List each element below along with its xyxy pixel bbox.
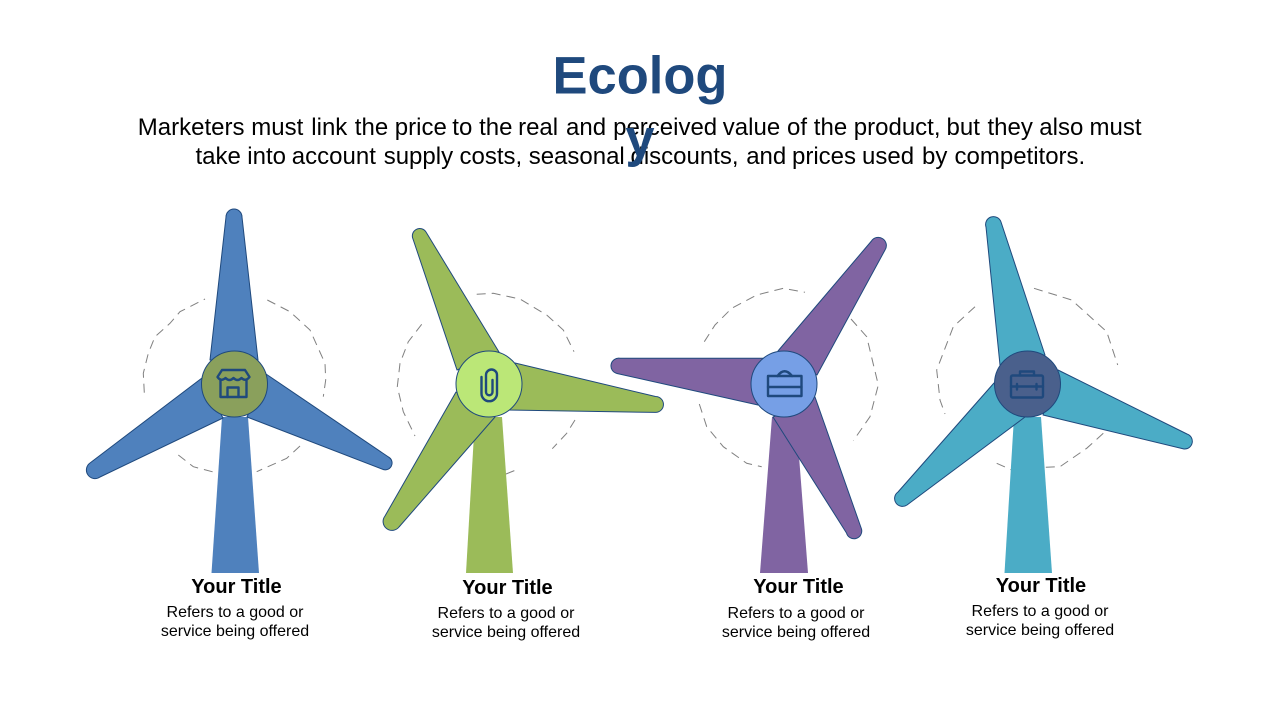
subtitle text block: discounts, [630, 143, 739, 170]
subtitle text block: into [247, 143, 286, 170]
subtitle text block: they [988, 114, 1033, 141]
caption: blue turbine [161, 576, 309, 640]
subtitle text block: to [452, 114, 472, 141]
caption: purple turbine: service being offered [722, 624, 870, 641]
caption: green turbine [432, 577, 580, 641]
caption: teal turbine [966, 575, 1114, 639]
caption: blue turbine: service being offered [161, 623, 309, 640]
caption: teal turbine: Refers to a good or [972, 603, 1109, 620]
subtitle text block: seasonal [529, 143, 625, 170]
subtitle text block: must [251, 114, 304, 141]
subtitle text block: by [922, 143, 947, 170]
icon: paperclip [482, 370, 497, 401]
subtitle text block: product, [854, 114, 941, 141]
subtitle text block: supply [384, 143, 453, 170]
caption: green turbine: Your Title [462, 577, 553, 599]
subtitle text block: the [479, 114, 512, 141]
subtitle text block: prices [792, 143, 856, 170]
icon: storefront [218, 370, 250, 397]
subtitle text block: the [355, 114, 388, 141]
subtitle text block: take [196, 143, 241, 170]
subtitle text block [138, 114, 1142, 170]
caption: teal turbine: Your Title [996, 575, 1086, 597]
panel: green wind turbine [383, 229, 663, 573]
icon: briefcase with clasps [1011, 372, 1043, 398]
subtitle text block: costs, [460, 143, 522, 170]
caption: green turbine: service being offered [432, 624, 580, 641]
subtitle text block: of [787, 114, 807, 141]
panel: blue wind turbine [86, 209, 392, 573]
caption: blue turbine: Your Title [191, 576, 282, 598]
subtitle text block: the [814, 114, 847, 141]
subtitle text block: perceived [613, 114, 717, 141]
subtitle text block: and [566, 114, 606, 141]
subtitle text block: also [1039, 114, 1083, 141]
subtitle text block: competitors. [954, 143, 1085, 170]
caption: purple turbine [722, 576, 870, 641]
panel: teal wind turbine [895, 217, 1192, 573]
subtitle text block: and [746, 143, 786, 170]
subtitle text block: must [1090, 114, 1142, 141]
subtitle text block: value [723, 114, 780, 141]
icon: briefcase [768, 371, 802, 396]
subtitle text block: but [946, 114, 980, 141]
caption: purple turbine: Refers to a good or [728, 605, 865, 622]
subtitle text block: real [518, 114, 558, 141]
subtitle text block: link [311, 114, 348, 141]
subtitle text block: account [292, 143, 376, 170]
title: y [625, 109, 655, 168]
panel: purple wind turbine [611, 237, 886, 573]
caption: teal turbine: service being offered [966, 622, 1114, 639]
caption: purple turbine: Your Title [753, 576, 844, 598]
caption: blue turbine: Refers to a good or [167, 604, 304, 621]
subtitle text block: used [862, 143, 914, 170]
caption: green turbine: Refers to a good or [438, 605, 575, 622]
title: Ecolog [552, 46, 728, 106]
subtitle text block: Marketers [138, 114, 244, 141]
subtitle text block: price [395, 114, 447, 141]
